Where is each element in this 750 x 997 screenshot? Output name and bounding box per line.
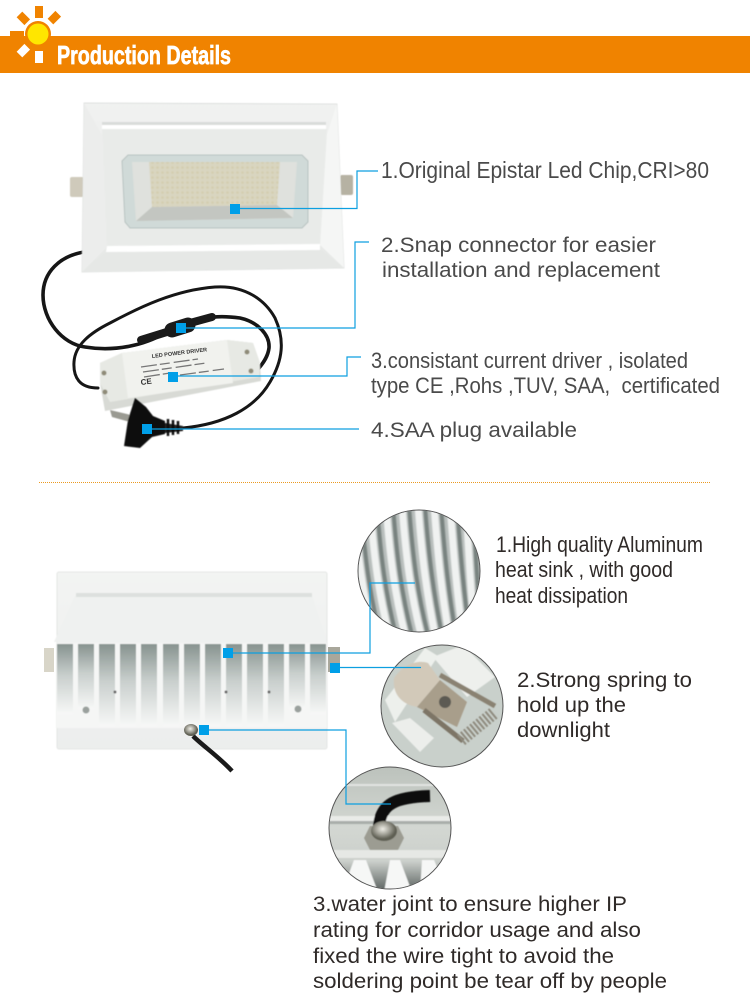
text: 2 Strong spring: downlight [517,718,610,742]
callout markers: bottom section [199,648,340,735]
text: 2 Strong spring: hold up the [517,693,626,717]
LED driver [100,340,261,411]
text: 1 High quality aluminum [495,532,703,608]
spring clips rear [44,648,54,672]
text: 3 constant current driver: 3.consistant current driver , isolated [371,348,688,373]
gland nut and wire [184,724,232,771]
plug [110,398,183,448]
text: 2 Snap connector: installation and replacement [382,258,660,282]
text: 2 Snap connector [381,233,660,282]
driver label: LED POWER DRIVER [152,347,207,360]
detail circle: heat sink [354,505,482,635]
product photo: front of downlight with driver and plug [43,103,353,448]
callout leaders: bottom section [204,583,421,804]
sun icon [10,6,61,63]
text: 3 water joint: fixed the wire tight to avoid the [313,944,614,968]
text: 2 Strong spring: 2.Strong spring to [517,668,692,692]
driver label: CE [140,377,153,387]
text: 3 constant current driver: type CE ,Rohs ,TUV, SAA, certificated [371,373,720,398]
header banner [0,6,750,73]
text: 1 High quality aluminum: 1.High quality Aluminum [496,532,703,557]
text: 3 water joint [313,892,667,993]
text: 1 High quality aluminum: heat dissipation [495,583,628,608]
driver label [140,347,224,387]
text: 3 constant current driver [371,348,720,398]
product photo: back of downlight with heat sink [44,572,340,771]
text: 1 Original Epistar Led Chip: 1.Original Epistar Led Chip,CRI>80 [381,157,709,183]
text: 2 Strong spring [517,668,692,742]
cable loops [43,252,281,428]
text: 3 water joint: 3.water joint to ensure higher IP [313,892,627,916]
detail circle: spring clip [381,645,503,767]
spring clips [70,175,353,197]
detail circle: water joint [328,767,453,892]
text: 3 water joint: soldering point be tear off by people [313,969,667,993]
text: 3 water joint: rating for corridor usage and also [313,918,641,942]
text: 1 High quality aluminum: heat sink , with good [495,557,673,582]
dotted divider [39,482,711,484]
text: 2 Snap connector: 2.Snap connector for easier [381,233,656,257]
callout markers: top section [142,204,240,434]
snap connector [141,317,212,340]
text: 4 SAA plug: 4.SAA plug available [371,418,577,442]
lens [122,155,308,228]
lamp frame [82,103,344,272]
rear housing [54,572,327,749]
callout leaders: top section [147,171,378,429]
lamp head [102,129,327,247]
heat sink fins [56,643,327,728]
title: Production Details [57,40,231,70]
